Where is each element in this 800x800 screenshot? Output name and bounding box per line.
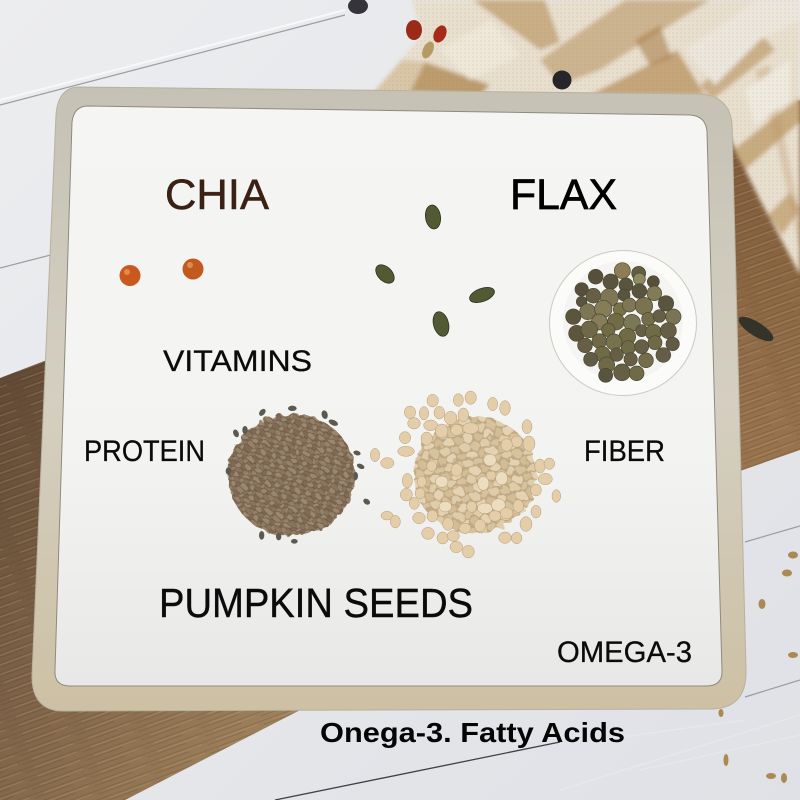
tray white surface [55, 106, 722, 686]
heading: chia: CHIA [165, 171, 269, 219]
label: protein: PROTEIN [84, 435, 205, 468]
chia seed pile [226, 406, 371, 544]
checkered cloth [374, 0, 800, 275]
scattered grains [718, 552, 798, 783]
label: omega-3: OMEGA-3 [557, 636, 692, 669]
heading: pumpkin seeds: PUMPKIN SEEDS [159, 580, 473, 626]
bowl of seeds [550, 250, 696, 396]
beans on table [348, 0, 572, 90]
orange seeds [120, 258, 204, 286]
label: vitamins: VITAMINS [163, 345, 312, 378]
label: fiber: FIBER [584, 435, 665, 468]
dark seed on wood [735, 312, 777, 346]
pale pumpkin seed pile [370, 391, 561, 558]
tray frame [32, 87, 746, 711]
caption: Onega-3. Fatty Acids [320, 717, 625, 748]
green pumpkin seeds [372, 204, 496, 338]
heading: flax: FLAX [510, 171, 617, 219]
